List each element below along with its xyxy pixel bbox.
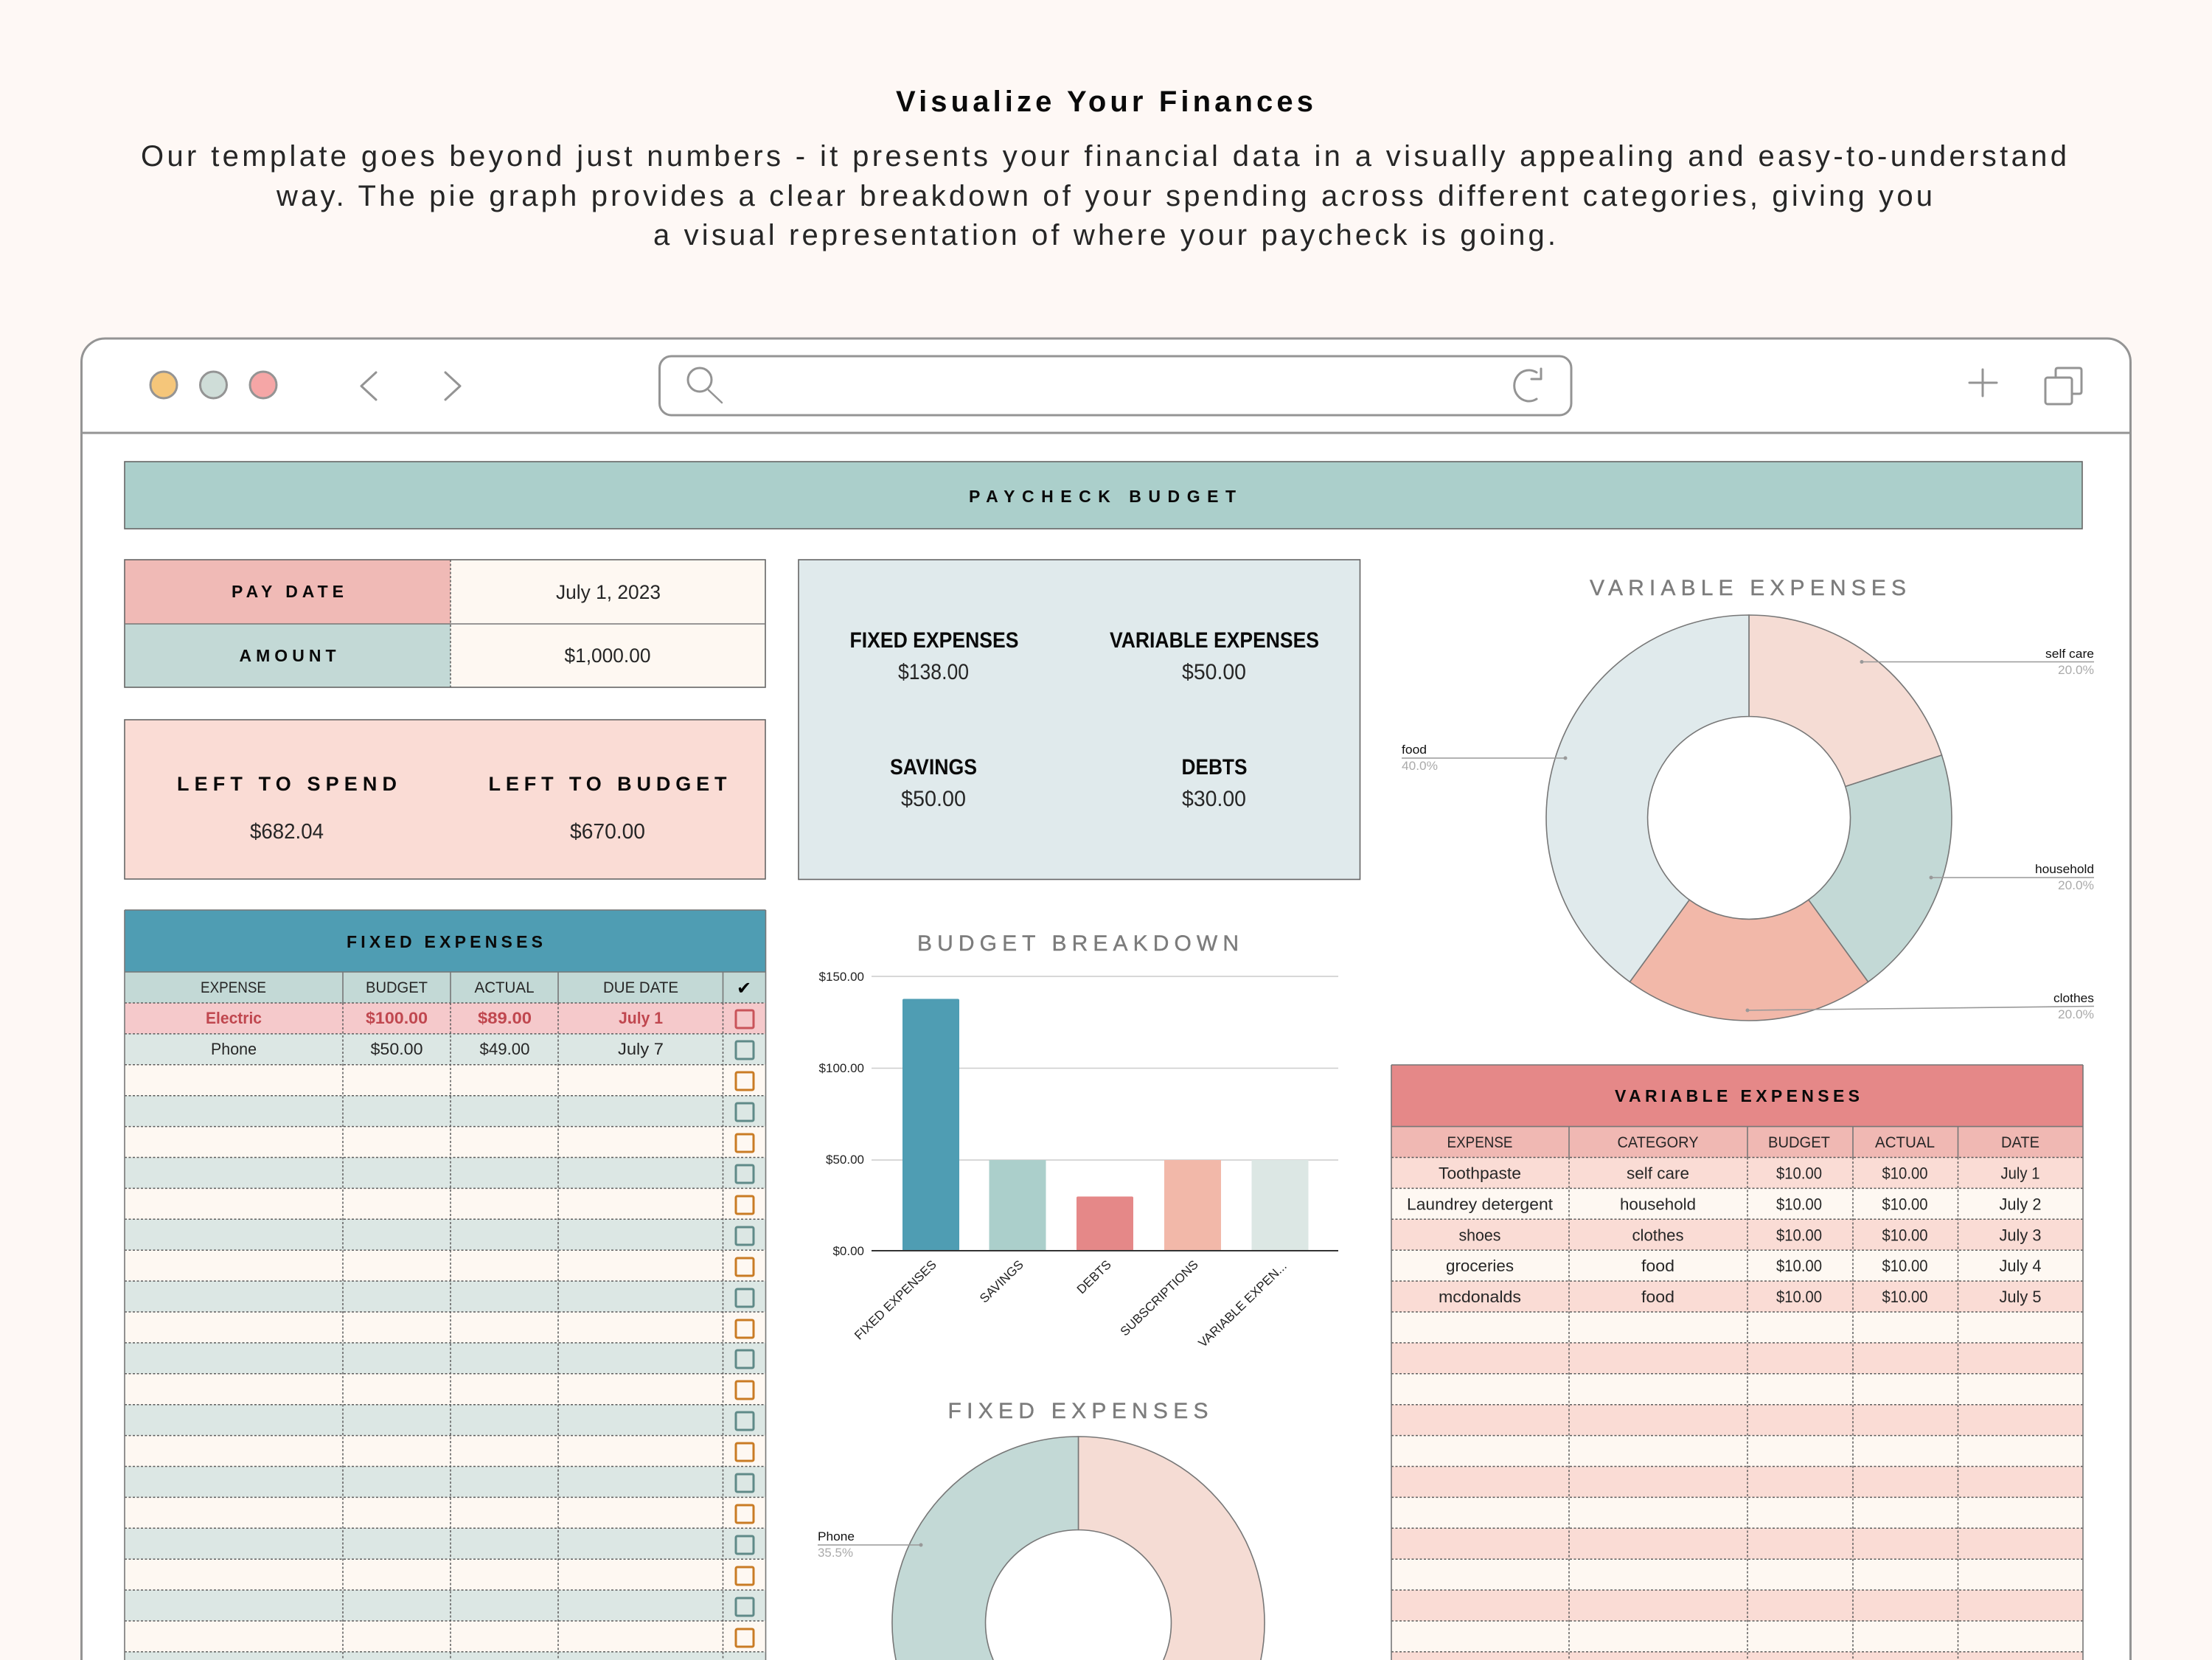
icon: search — [688, 368, 722, 403]
fixed expenses column headers: ACTUAL — [475, 979, 534, 996]
row: groceries: groceries — [1446, 1257, 1514, 1275]
x axis labels: SAVINGS — [977, 1257, 1026, 1306]
fixed expenses column headers: BUDGET — [366, 979, 428, 996]
chart title: FIXED EXPENSES — [948, 1399, 1208, 1423]
row: mcdonalds: food — [1641, 1288, 1674, 1306]
banner: paycheck budget — [125, 462, 2082, 529]
row: Laundrey detergent — [1407, 1195, 2041, 1213]
callout: household: household — [2035, 862, 2094, 876]
panel: expense totals: SAVINGS — [890, 755, 977, 779]
panel: expense totals: FIXED EXPENSES — [849, 628, 1019, 653]
fixed expenses rows — [125, 1003, 765, 1660]
variable expenses column headers — [1391, 1127, 2083, 1158]
row: Laundrey detergent: $10.00 — [1776, 1195, 1822, 1213]
row: groceries — [1446, 1257, 2041, 1275]
row: shoes: $10.00 — [1776, 1226, 1822, 1244]
callout: phone: 35.5% — [818, 1546, 853, 1560]
panel: pay date and amount: $1,000.00 — [565, 645, 650, 667]
donut chart: fixed expenses — [818, 1399, 1265, 1660]
callout: self care — [1860, 647, 2094, 677]
callout: self care: self care — [2045, 647, 2094, 661]
x axis labels: SUBSCRIPTIONS — [1118, 1257, 1201, 1338]
chart title: VARIABLE EXPENSES — [1590, 576, 1906, 600]
row: Phone — [211, 1040, 664, 1058]
row: mcdonalds: $10.00 — [1882, 1288, 1927, 1306]
row: Electric: Electric — [206, 1009, 262, 1027]
row: Laundrey detergent: household — [1620, 1195, 1696, 1213]
variable expenses column headers: EXPENSE — [1447, 1134, 1513, 1151]
row: groceries: July 4 — [2000, 1257, 2041, 1275]
y axis labels: $100.00 — [819, 1061, 864, 1075]
row: shoes: shoes — [1458, 1226, 1501, 1244]
panel: expense totals: $30.00 — [1182, 787, 1246, 811]
variable expenses column headers: CATEGORY — [1618, 1134, 1699, 1151]
callout: phone: Phone — [818, 1529, 855, 1543]
panel: left to spend and left to budget: LEFT TO SPEND — [177, 773, 397, 795]
fixed expenses heading: FIXED EXPENSES — [347, 932, 543, 951]
icon: copy tabs — [2045, 368, 2081, 404]
variable expenses rows — [1391, 1158, 2083, 1660]
variable expenses heading: VARIABLE EXPENSES — [1615, 1086, 1860, 1105]
row: Toothpaste: Toothpaste — [1439, 1164, 1521, 1183]
panel: pay date and amount — [125, 560, 765, 687]
x axis labels — [852, 1257, 1290, 1350]
bars — [902, 999, 1308, 1251]
variable expenses column headers: DATE — [2001, 1134, 2039, 1151]
intro paragraph: Our template goes beyond just numbers - it presents your financial data in a visually appealing and easy-to-understand — [141, 140, 2067, 173]
panel: pay date and amount: PAY DATE — [232, 582, 344, 601]
intro paragraph: a visual representation of where your paycheck is going. — [653, 219, 1556, 251]
row: Electric: $100.00 — [366, 1009, 428, 1027]
row: Phone: $50.00 — [370, 1040, 423, 1058]
row: shoes: clothes — [1632, 1226, 1684, 1244]
donut chart: variable expenses — [1402, 576, 2094, 1021]
panel: left to spend and left to budget: $670.00 — [570, 820, 645, 844]
callout: phone — [818, 1529, 923, 1560]
intro paragraph: way. The pie graph provides a clear breakdown of your spending across different categories, giving you — [276, 180, 1933, 212]
row: groceries: $10.00 — [1882, 1257, 1927, 1275]
panel: expense totals: DEBTS — [1181, 755, 1248, 779]
icon: window control dots — [150, 372, 276, 398]
callout: food: food — [1402, 743, 1427, 757]
row: groceries: food — [1641, 1257, 1674, 1275]
icon: forward arrow — [445, 372, 460, 400]
panel: expense totals — [799, 560, 1360, 879]
row: Laundrey detergent: Laundrey detergent — [1407, 1195, 1553, 1213]
fixed expenses column headers — [125, 972, 765, 1003]
panel: expense totals: $138.00 — [898, 660, 969, 684]
panel: left to spend and left to budget — [125, 720, 765, 879]
panel: variable expenses table — [1391, 1065, 2083, 1660]
panel: fixed expenses table — [125, 910, 765, 1660]
callout: self care: 20.0% — [2058, 663, 2094, 677]
panel: left to spend and left to budget: $682.04 — [250, 820, 324, 844]
x axis labels: DEBTS — [1074, 1257, 1114, 1296]
panel: pay date and amount: AMOUNT — [239, 646, 336, 665]
row: Electric: $89.00 — [478, 1009, 532, 1027]
fixed expenses heading — [125, 910, 765, 972]
callout: food: 40.0% — [1402, 759, 1438, 773]
callout: clothes: clothes — [2053, 991, 2094, 1005]
row: Electric — [206, 1009, 663, 1027]
callout: clothes — [1746, 991, 2094, 1021]
row: mcdonalds — [1439, 1288, 2041, 1306]
row: Electric: July 1 — [619, 1009, 663, 1027]
row: shoes: $10.00 — [1882, 1226, 1927, 1244]
row: Toothpaste: self care — [1627, 1164, 1689, 1183]
row: Phone: July 7 — [618, 1040, 664, 1058]
checkboxes — [736, 1010, 754, 1647]
row: Laundrey detergent: $10.00 — [1882, 1195, 1927, 1213]
panel: left to spend and left to budget: LEFT TO BUDGET — [488, 773, 727, 795]
row: mcdonalds: July 5 — [2000, 1288, 2041, 1306]
y axis labels — [819, 970, 864, 1258]
variable expenses column headers: BUDGET — [1768, 1134, 1830, 1151]
y axis labels: $50.00 — [826, 1153, 864, 1167]
row: shoes: July 3 — [2000, 1226, 2041, 1244]
bar chart: budget breakdown — [819, 931, 1338, 1350]
row: Laundrey detergent: July 2 — [2000, 1195, 2041, 1213]
row: Toothpaste — [1439, 1164, 2039, 1183]
fixed expenses column headers: EXPENSE — [201, 979, 266, 996]
x axis labels: FIXED EXPENSES — [852, 1257, 939, 1343]
row: shoes — [1458, 1226, 2041, 1244]
chart title: BUDGET BREAKDOWN — [917, 931, 1239, 956]
variable expenses column headers: ACTUAL — [1875, 1134, 1935, 1151]
x axis labels: VARIABLE EXPEN... — [1196, 1259, 1290, 1350]
y axis labels: $150.00 — [819, 970, 864, 984]
y axis labels: $0.00 — [832, 1244, 864, 1258]
row: Toothpaste: July 1 — [2001, 1164, 2039, 1183]
icon: back arrow — [361, 372, 376, 400]
row: mcdonalds: $10.00 — [1776, 1288, 1822, 1306]
row: groceries: $10.00 — [1776, 1257, 1822, 1275]
row: mcdonalds: mcdonalds — [1439, 1288, 1521, 1306]
fixed expenses column headers: ✔ — [737, 978, 751, 999]
panel: expense totals: $50.00 — [1182, 660, 1246, 684]
callout: food — [1402, 743, 1568, 773]
icon: plus — [1969, 369, 1997, 396]
row: Phone: Phone — [211, 1040, 257, 1058]
browser window — [81, 338, 2131, 1660]
variable expenses heading — [1391, 1065, 2083, 1127]
callout: household: 20.0% — [2058, 878, 2094, 892]
panel: pay date and amount: July 1, 2023 — [556, 581, 661, 603]
row: Phone: $49.00 — [479, 1040, 529, 1058]
icon: reload — [1514, 369, 1541, 401]
intro paragraph — [141, 140, 2067, 251]
panel: expense totals: VARIABLE EXPENSES — [1110, 628, 1319, 653]
callout: clothes: 20.0% — [2058, 1007, 2094, 1021]
fixed expenses column headers: DUE DATE — [603, 979, 678, 996]
banner: paycheck budget: PAYCHECK BUDGET — [969, 487, 1236, 506]
address bar — [659, 356, 1571, 415]
row: Toothpaste: $10.00 — [1776, 1164, 1822, 1183]
row: Toothpaste: $10.00 — [1882, 1164, 1927, 1183]
panel: expense totals: $50.00 — [901, 787, 966, 811]
title: Visualize Your Finances — [896, 86, 1313, 118]
callout: household — [1929, 862, 2094, 892]
